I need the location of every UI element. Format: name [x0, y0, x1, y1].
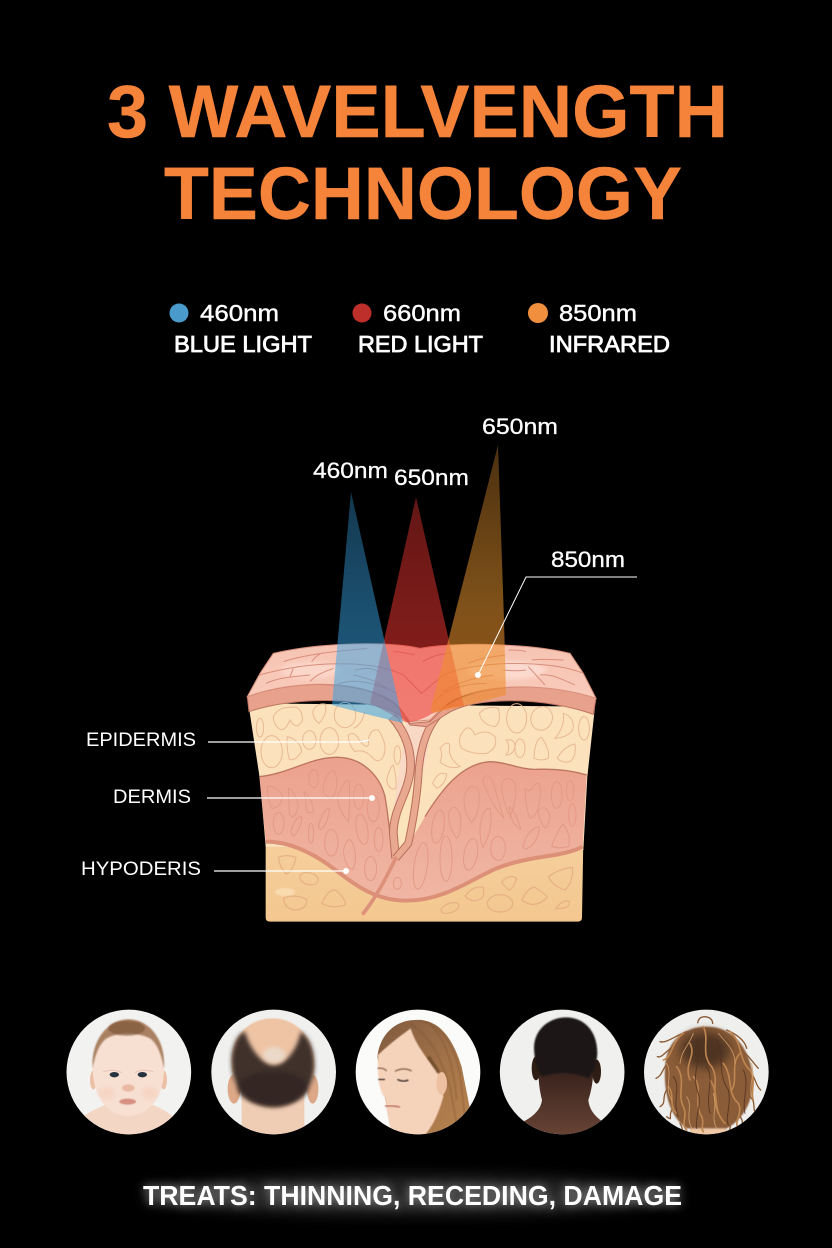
legend item: infrared: 850nm: [559, 300, 637, 326]
legend item: blue light: BLUE LIGHT: [174, 331, 312, 357]
legend item: blue light: [170, 300, 312, 357]
stratum corneum: [247, 644, 596, 722]
beam: blue 460nm: [332, 492, 403, 723]
photo: man with short dark hair: [500, 1010, 624, 1134]
fat layer: [248, 702, 595, 850]
legend item: red light: RED LIGHT: [358, 331, 483, 357]
title: TECHNOLOGY: [164, 152, 682, 235]
treats caption: TREATS: THINNING, RECEDING, DAMAGE: [143, 1180, 682, 1211]
photo: woman in profile: [356, 1010, 480, 1134]
callout: 850nm: 850nm: [551, 547, 625, 572]
legend item: blue light: 460nm: [200, 300, 279, 326]
callout: 850nm: [475, 547, 637, 678]
legend: [170, 300, 670, 357]
dermis layer: [259, 757, 587, 902]
callout: hypoderis: [81, 858, 349, 880]
photo: baby: [66, 1010, 192, 1134]
treats caption glow: [142, 1175, 682, 1215]
beam label: 650nm red: 650nm: [394, 465, 469, 490]
epidermis band: [247, 685, 596, 727]
photo: balding man: [211, 1010, 336, 1134]
legend item: red light: 660nm: [383, 300, 461, 326]
legend item: red light: [352, 300, 483, 357]
callout: dermis: [113, 786, 375, 808]
legend item: infrared: [528, 300, 670, 357]
centre gap between follicle strands: [390, 717, 433, 853]
skin cross-section diagram: [247, 644, 596, 922]
title: [107, 70, 728, 235]
light beams: [332, 445, 506, 723]
hypodermis layer: [266, 840, 583, 922]
title: 3 WAVELVENGTH: [107, 70, 728, 153]
legend item: infrared: INFRARED: [549, 331, 670, 357]
beam label: 650nm orange: 650nm: [482, 414, 558, 439]
callout: epidermis: EPIDERMIS: [86, 729, 196, 751]
beam label: 460nm: 460nm: [313, 458, 388, 483]
hair follicle: [363, 715, 438, 913]
beam: red 650nm: [370, 497, 464, 722]
photo: curly damaged hair: [644, 1010, 769, 1134]
callout: dermis: DERMIS: [113, 786, 191, 808]
callout: hypoderis: HYPODERIS: [81, 858, 201, 880]
beam: orange 850nm: [431, 445, 506, 713]
